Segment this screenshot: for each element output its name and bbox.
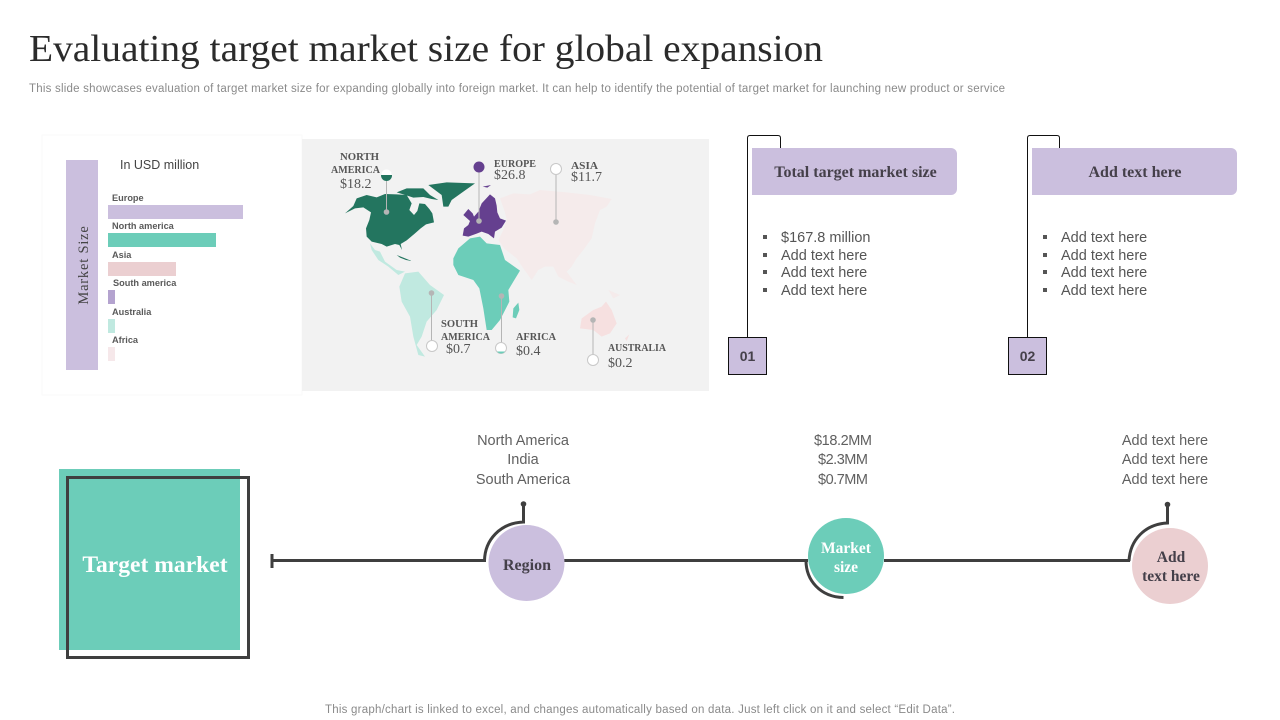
label: Europe: EUROPE — [494, 158, 536, 170]
node: Region — [484, 501, 564, 601]
connector 02 — [1028, 136, 1060, 337]
label: Africa: $0.4 — [516, 344, 540, 359]
bar: Europe — [108, 193, 243, 219]
bar: Australia — [108, 307, 152, 333]
header 01 — [752, 148, 957, 195]
axis label: market size: Market Size — [76, 225, 92, 305]
node: Market size: size — [834, 559, 858, 576]
region: Europe — [463, 185, 506, 238]
bullets 02: Add text here — [1061, 248, 1147, 264]
number 01: 01 — [740, 348, 755, 364]
map regions — [345, 182, 629, 357]
timeline text: placeholder: Add text here — [1122, 433, 1208, 449]
bar: North america — [108, 221, 216, 247]
bar: South america — [108, 278, 177, 304]
target market box: Target market — [82, 552, 228, 578]
number 01 — [728, 338, 766, 374]
panel: total target market size — [728, 136, 957, 374]
label: Africa: AFRICA — [516, 331, 556, 343]
bullets 02 — [1043, 230, 1147, 299]
timeline text: market sizes — [814, 433, 872, 488]
timeline text: regions: South America — [476, 472, 571, 488]
panel: world map — [302, 139, 709, 391]
number 02: 02 — [1020, 348, 1035, 364]
pin: North America — [381, 170, 392, 215]
timeline text: placeholder: Add text here — [1122, 452, 1208, 468]
bar: Australia: Australia — [112, 307, 152, 317]
label: South America — [441, 318, 490, 357]
footer note: This graph/chart is linked to excel, and changes automatically based on data. Just left click on it and select “Edit Data”. — [325, 704, 955, 716]
timeline text: market sizes: $2.3MM — [818, 452, 868, 468]
timeline text: market sizes: $0.7MM — [818, 472, 868, 488]
title: Evaluating target market size for global expansion — [29, 28, 823, 70]
label: North America: $18.2 — [340, 177, 372, 192]
target market box — [59, 469, 248, 658]
bullets 01: Add text here — [781, 248, 867, 264]
timeline line — [272, 554, 1130, 568]
header 02 — [1032, 148, 1237, 195]
bullets 02: Add text here — [1061, 230, 1147, 246]
node: Market size — [806, 518, 884, 598]
region: Australia — [580, 302, 629, 341]
bar: Asia: Asia — [112, 250, 132, 260]
label: Europe: $26.8 — [494, 168, 526, 183]
bullets 01: $167.8 million — [781, 230, 870, 246]
region: Asia — [498, 190, 620, 298]
bullets 02: Add text here — [1061, 265, 1147, 281]
node: Add text here: text here — [1142, 568, 1200, 585]
region: Africa — [453, 237, 520, 330]
label: North America — [331, 151, 380, 192]
label: Australia: AUSTRALIA — [608, 342, 666, 354]
number 02 — [1008, 338, 1046, 374]
panel: add text here — [1008, 136, 1237, 374]
pin: Africa — [496, 293, 506, 354]
label: South America: $0.7 — [446, 342, 470, 357]
panel: bar chart — [42, 135, 302, 395]
label: North America: AMERICA — [331, 164, 380, 176]
node: Add text here — [1129, 502, 1208, 604]
connector 01 — [748, 136, 780, 337]
chart unit: In USD million — [120, 158, 199, 172]
region: North America — [345, 182, 475, 261]
bar: South america: South america — [113, 278, 177, 288]
node: Market size: Market — [821, 540, 872, 557]
timeline text: placeholder — [1122, 433, 1208, 488]
timeline text: regions: North America — [477, 433, 570, 449]
label: Europe — [494, 158, 536, 183]
label: South America: SOUTH — [441, 318, 478, 330]
axis label: market size — [66, 160, 98, 370]
label: Australia — [608, 342, 666, 371]
label: South America: AMERICA — [441, 331, 490, 343]
bar: Asia — [108, 250, 176, 276]
timeline text: market sizes: $18.2MM — [814, 433, 872, 449]
pin: Europe — [474, 162, 484, 224]
pin: Australia — [588, 317, 598, 366]
bar: Africa — [108, 335, 139, 361]
node: Add text here: Add — [1157, 549, 1186, 566]
label: Australia: $0.2 — [608, 356, 632, 371]
bar: Europe: Europe — [112, 193, 144, 203]
bar: North america: North america — [112, 221, 175, 231]
region: South America — [370, 243, 444, 357]
label: Asia — [571, 160, 602, 185]
bullets 01: Add text here — [781, 265, 867, 281]
pin: Asia — [550, 164, 562, 225]
node: Region: Region — [503, 557, 551, 574]
bullets 01: Add text here — [781, 283, 867, 299]
timeline text: regions: India — [507, 452, 540, 468]
pin: South America — [426, 290, 438, 352]
bullets 02: Add text here — [1061, 283, 1147, 299]
label: Asia: ASIA — [571, 160, 598, 172]
label: North America: NORTH — [340, 151, 379, 163]
subtitle: This slide showcases evaluation of target market size for expanding globally into foreign market. It can help to identify the potential of target market for launching new product or service — [29, 83, 1005, 95]
bullets 01 — [763, 230, 870, 299]
timeline text: regions — [476, 433, 571, 488]
label: Asia: $11.7 — [571, 170, 602, 185]
header 01: Total target market size — [774, 164, 937, 181]
label: Africa — [516, 331, 556, 359]
bar: Africa: Africa — [112, 335, 139, 345]
timeline text: placeholder: Add text here — [1122, 472, 1208, 488]
header 02: Add text here — [1088, 164, 1182, 181]
